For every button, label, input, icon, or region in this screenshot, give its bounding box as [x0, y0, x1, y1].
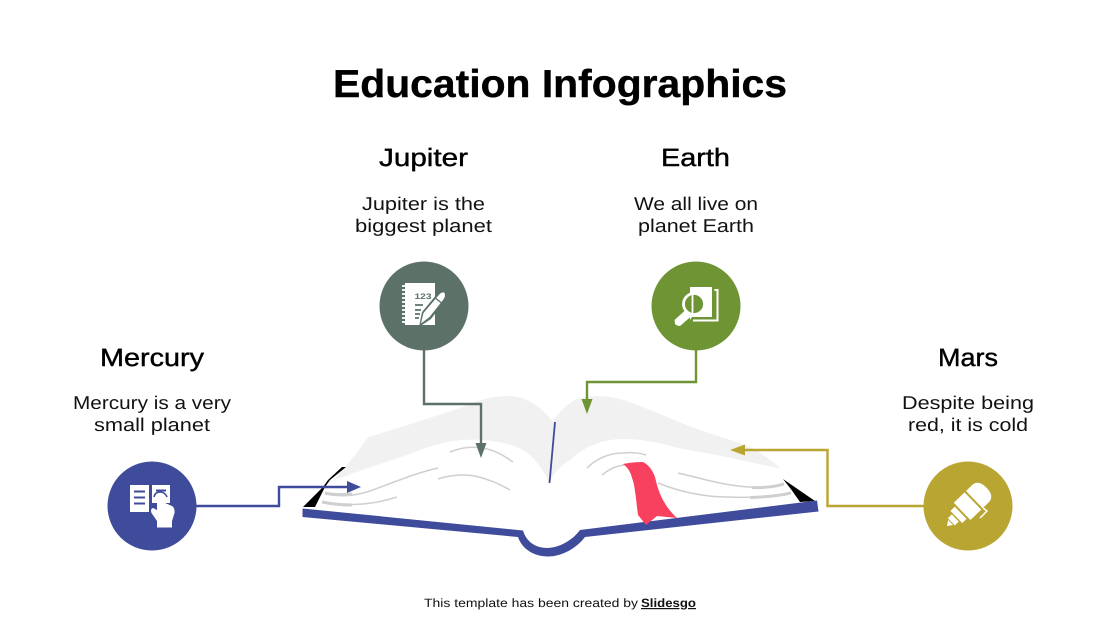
book: centre blue line: [550, 422, 555, 483]
arrow: Jupiter to book: [424, 350, 486, 458]
panel: Earth: [634, 144, 758, 350]
text block: Mercury description: [73, 392, 232, 435]
icon: open book and hand: [108, 462, 196, 550]
text block: Jupiter description: [355, 193, 492, 236]
book: page curve lines, right: [587, 453, 791, 498]
footer credit: [424, 596, 696, 610]
text block: Jupiter description: Jupiter is the: [362, 193, 485, 214]
book: blue cover: [302, 500, 818, 556]
text block: Jupiter description: biggest planet: [355, 215, 492, 236]
book: page curve lines, left: [322, 447, 513, 505]
heading: Earth: Earth: [661, 144, 730, 172]
arrow: Mercury to book: [196, 481, 361, 506]
panel: Mercury: [73, 344, 232, 550]
text block: Earth description: [634, 193, 758, 236]
book: white front pages: [320, 439, 800, 541]
icon: marker pen: [924, 462, 1012, 550]
footer credit: This template has been created by: [424, 596, 638, 610]
panel: Jupiter: [355, 144, 492, 350]
text block: Mars description: red, it is cold: [908, 414, 1028, 435]
footer credit: Slidesgo: [641, 596, 696, 610]
text block: Mercury description: small planet: [94, 414, 210, 435]
icon: book and magnifier: [652, 262, 740, 350]
arrow: Mars to book: [730, 444, 924, 506]
arrow: Earth to book: [582, 350, 696, 414]
text block: Mercury description: Mercury is a very: [73, 392, 232, 413]
book: black corners: [303, 467, 346, 507]
title: Education Infographics: [333, 63, 787, 106]
text block: Earth description: We all live on: [634, 193, 758, 214]
book: red bookmark: [623, 462, 677, 525]
text block: Mars description: [902, 392, 1034, 435]
heading: Jupiter: Jupiter: [379, 144, 468, 172]
panel: Mars: [902, 344, 1034, 550]
heading: Mercury: Mercury: [100, 344, 205, 372]
book illustration: [302, 396, 818, 556]
icon: notebook and pencil: 123: [414, 292, 432, 301]
book: grey back pages: [333, 396, 780, 490]
icon: notebook and pencil: [380, 262, 468, 350]
heading: Mars: Mars: [938, 344, 998, 372]
text block: Mars description: Despite being: [902, 392, 1034, 413]
text block: Earth description: planet Earth: [638, 215, 754, 236]
